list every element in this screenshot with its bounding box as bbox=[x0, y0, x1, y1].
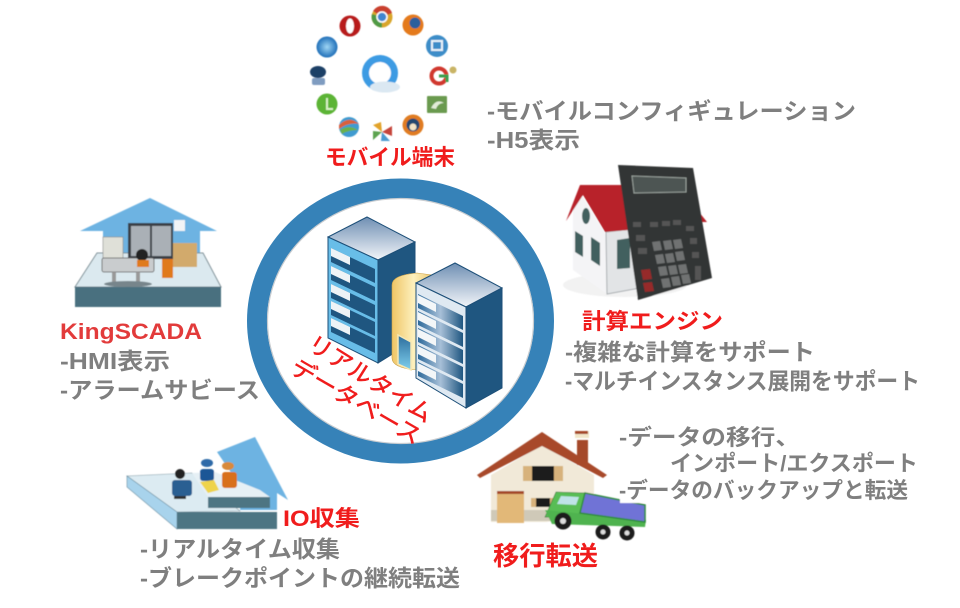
desk bbox=[102, 258, 154, 282]
icon: dolphin bbox=[427, 96, 447, 113]
label: migration: 移行転送 bbox=[493, 541, 598, 571]
roof bbox=[477, 432, 607, 478]
mobile line 1: -モバイルコンフィギュレーション bbox=[487, 98, 856, 124]
arrow bbox=[217, 437, 288, 510]
upper step front bbox=[208, 497, 270, 508]
worker dark bbox=[172, 469, 192, 499]
house side wall bbox=[606, 228, 640, 294]
roof right bbox=[695, 207, 707, 222]
truck chassis bbox=[545, 510, 646, 527]
window bbox=[128, 223, 173, 259]
migration line 1: -データの移行、 bbox=[619, 425, 800, 450]
kingscada line 2: -アラームサビース bbox=[60, 377, 260, 403]
arrow roof bbox=[80, 198, 217, 255]
label line 1: リアルタイム bbox=[303, 330, 438, 427]
icon: house and calculator bbox=[563, 165, 712, 300]
icon: yellow cylinder bbox=[392, 273, 440, 370]
house base bbox=[491, 510, 551, 521]
text: mobile features bbox=[487, 98, 856, 153]
central ring bbox=[257, 188, 544, 454]
icon: house and truck bbox=[477, 431, 652, 540]
icon: firefox bbox=[402, 14, 424, 36]
shadow bbox=[563, 273, 687, 297]
calculator red keys bbox=[641, 269, 654, 292]
text: kingscada features bbox=[60, 348, 260, 403]
migration line 3: -データのバックアップと転送 bbox=[619, 478, 908, 503]
machine bbox=[103, 237, 123, 259]
icon: center browser bbox=[366, 58, 400, 92]
house windows bbox=[575, 208, 630, 269]
mobile line 2: -H5表示 bbox=[487, 127, 580, 153]
floor shadow bbox=[104, 281, 152, 287]
icon: swirl bbox=[339, 117, 359, 137]
text: io features bbox=[140, 536, 460, 591]
calculation line 2: -マルチインスタンス展開をサポート bbox=[565, 368, 920, 394]
calculator body bbox=[618, 165, 712, 300]
icon: green browser bbox=[316, 94, 338, 114]
worker orange bbox=[222, 462, 237, 488]
label: calculation engine: 計算エンジン bbox=[582, 309, 723, 334]
lower platform top bbox=[127, 473, 240, 512]
icon: database servers bbox=[328, 217, 502, 408]
icon: browser ring bbox=[310, 6, 456, 141]
text: migration features bbox=[619, 425, 918, 503]
icon: chrome bbox=[372, 6, 392, 27]
upper step top bbox=[192, 472, 270, 497]
truck bed bbox=[580, 493, 645, 522]
io line 2: -ブレークポイントの継続転送 bbox=[140, 565, 460, 591]
calculation line 1: -複雑な計算をサポート bbox=[565, 339, 815, 365]
calculator gray keys bbox=[652, 239, 691, 288]
calculator screen bbox=[632, 176, 686, 193]
icon: g plus bbox=[432, 66, 456, 84]
icon: globe bbox=[316, 36, 338, 58]
hubs bbox=[560, 518, 630, 536]
lower platform front bbox=[177, 512, 277, 529]
platform top bbox=[75, 253, 221, 287]
icon: left server bbox=[328, 217, 415, 363]
box bbox=[173, 243, 197, 267]
house wall bbox=[491, 445, 594, 522]
icon: io collection bbox=[127, 437, 288, 529]
door bbox=[497, 491, 524, 523]
window upper bbox=[523, 466, 563, 481]
migration line 2: インポート/エクスポート bbox=[670, 451, 918, 476]
paper bbox=[174, 220, 185, 231]
icon: uc bbox=[402, 114, 424, 136]
icon: kingscada home bbox=[75, 198, 221, 307]
label: mobile: モバイル端末 bbox=[325, 145, 455, 170]
house roof bbox=[566, 185, 628, 232]
icon: opera bbox=[340, 16, 360, 36]
calculator small keys bbox=[633, 220, 701, 280]
chimney bbox=[575, 431, 589, 465]
label: kingscada: KingSCADA bbox=[60, 319, 202, 344]
text: calculation features bbox=[565, 339, 920, 394]
io line 1: -リアルタイム収集 bbox=[140, 536, 340, 562]
window lower bbox=[531, 498, 555, 507]
label line 2: データベース bbox=[286, 354, 426, 449]
icon: robot bbox=[310, 66, 326, 85]
house walls bbox=[573, 194, 638, 294]
icon: right server bbox=[416, 263, 502, 408]
central label bbox=[286, 330, 438, 449]
label: io collection: IO収集 bbox=[283, 506, 360, 531]
platform front bbox=[75, 287, 221, 307]
truck cab bbox=[545, 492, 586, 517]
icon: maxthon bbox=[426, 35, 448, 57]
text backing patch bbox=[620, 482, 652, 503]
truck wheels bbox=[554, 512, 634, 540]
truck window bbox=[557, 496, 579, 505]
worker blue bbox=[200, 459, 214, 481]
people bbox=[136, 249, 173, 278]
kingscada line 1: -HMI表示 bbox=[60, 348, 170, 374]
lower platform side bbox=[127, 476, 177, 529]
icon: pinwheel bbox=[373, 122, 392, 141]
yellow box bbox=[200, 480, 219, 493]
